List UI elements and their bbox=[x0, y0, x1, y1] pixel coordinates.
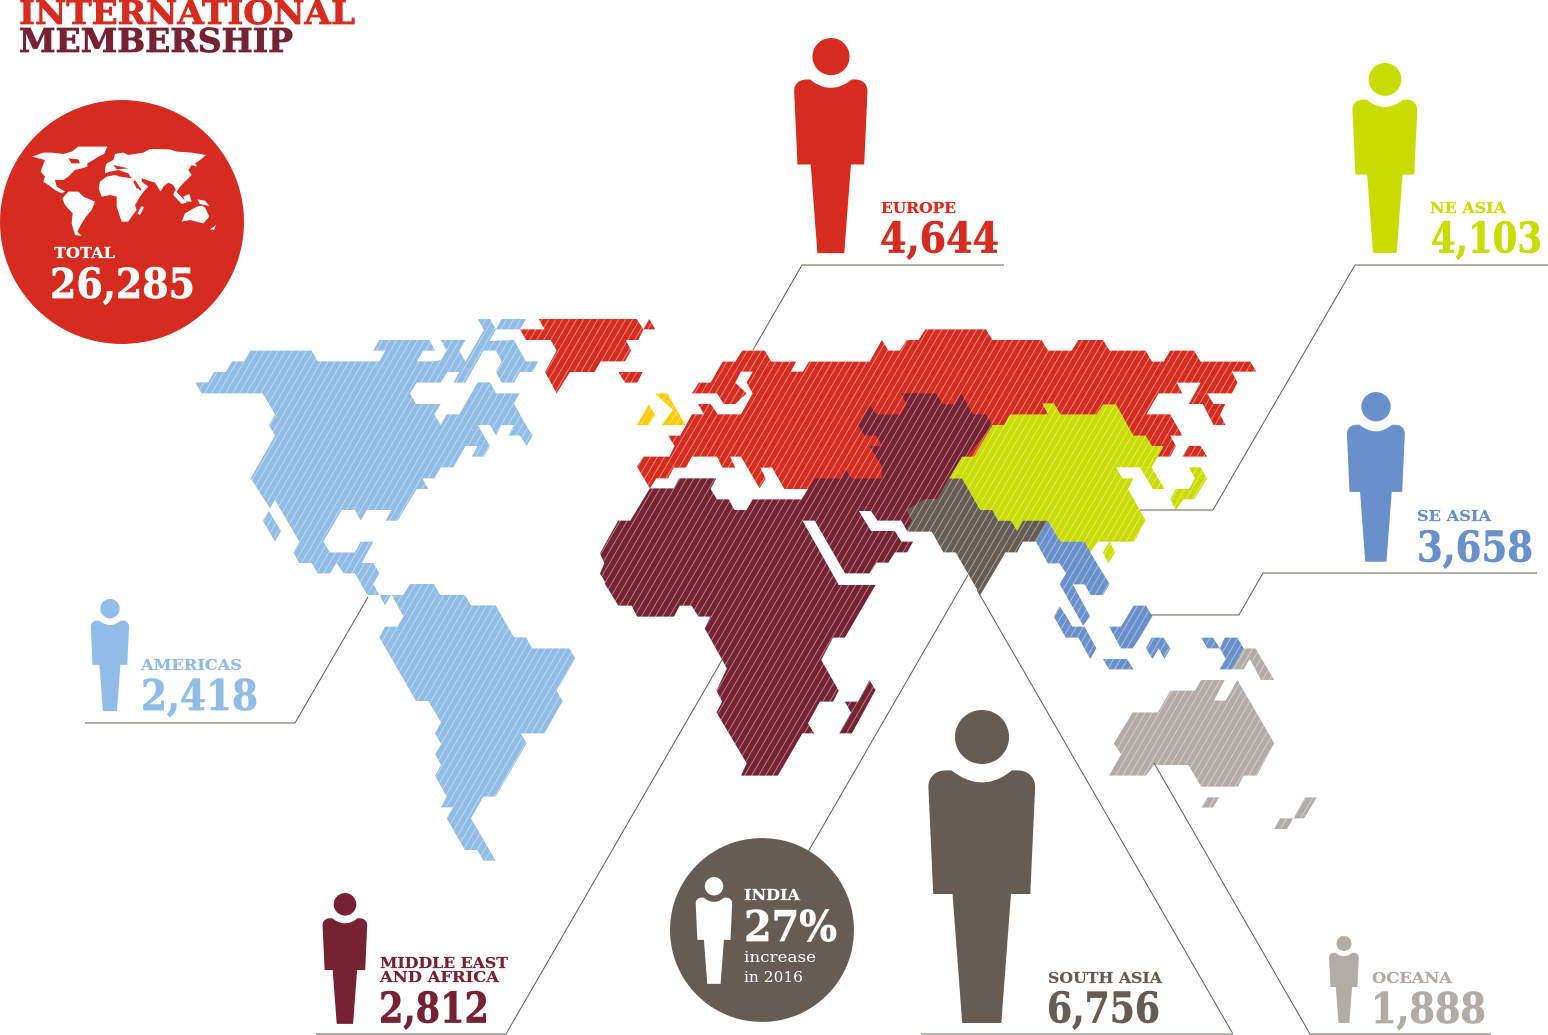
stat: SE Asia: SE ASIA bbox=[1417, 507, 1491, 525]
stat: South Asia: 6,756 bbox=[1047, 984, 1160, 1032]
stat: SE Asia: 3,658 bbox=[1417, 522, 1533, 572]
total circle: TOTAL bbox=[54, 244, 115, 262]
stat: Europe bbox=[794, 38, 999, 262]
icon: small world map bbox=[32, 147, 216, 236]
stat: South Asia bbox=[928, 710, 1162, 1032]
stat: Americas bbox=[91, 599, 258, 720]
stat: Oceana: 1,888 bbox=[1371, 984, 1486, 1033]
title: MEMBERSHIP bbox=[19, 21, 293, 60]
total circle bbox=[0, 100, 244, 344]
leader lines bbox=[85, 265, 1548, 1034]
stat: Middle East and Africa: MIDDLE EAST bbox=[380, 954, 509, 972]
title bbox=[19, 0, 355, 60]
stat: Oceana: OCEANA bbox=[1372, 969, 1452, 987]
map region: NE Asia bbox=[949, 403, 1207, 563]
map region: Greenland and Europe-Russia bbox=[520, 319, 1256, 489]
stat: Americas: AMERICAS bbox=[140, 656, 242, 674]
stat: Middle East and Africa: AND AFRICA bbox=[379, 968, 499, 986]
map region: Middle East and Africa bbox=[600, 393, 992, 776]
callout: India bbox=[670, 838, 854, 1022]
stat: Europe: EUROPE bbox=[881, 199, 956, 217]
map region: Oceana bbox=[1109, 648, 1317, 829]
map region: Americas bbox=[195, 319, 575, 861]
callout: India: in 2016 bbox=[744, 968, 803, 986]
callout: India: increase bbox=[744, 948, 816, 966]
stat: SE Asia bbox=[1347, 392, 1533, 572]
total circle: 26,285 bbox=[50, 260, 195, 308]
stat: South Asia: SOUTH ASIA bbox=[1048, 969, 1162, 987]
callout: India: 27% bbox=[744, 902, 837, 951]
stat: Americas: 2,418 bbox=[141, 671, 258, 720]
stat: NE Asia bbox=[1352, 63, 1542, 262]
map region: Iceland-Svalbard accent bbox=[637, 393, 685, 425]
callout: India: INDIA bbox=[744, 886, 800, 904]
stat: Oceana bbox=[1329, 936, 1486, 1033]
map region: South Asia bbox=[907, 478, 1048, 595]
stat: Middle East and Africa bbox=[323, 893, 509, 1032]
stat: Middle East and Africa: 2,812 bbox=[379, 984, 489, 1032]
stat: NE Asia: NE ASIA bbox=[1430, 199, 1506, 217]
world map bbox=[190, 315, 1330, 865]
map region: SE Asia bbox=[1036, 521, 1244, 669]
stat: Europe: 4,644 bbox=[880, 214, 999, 262]
